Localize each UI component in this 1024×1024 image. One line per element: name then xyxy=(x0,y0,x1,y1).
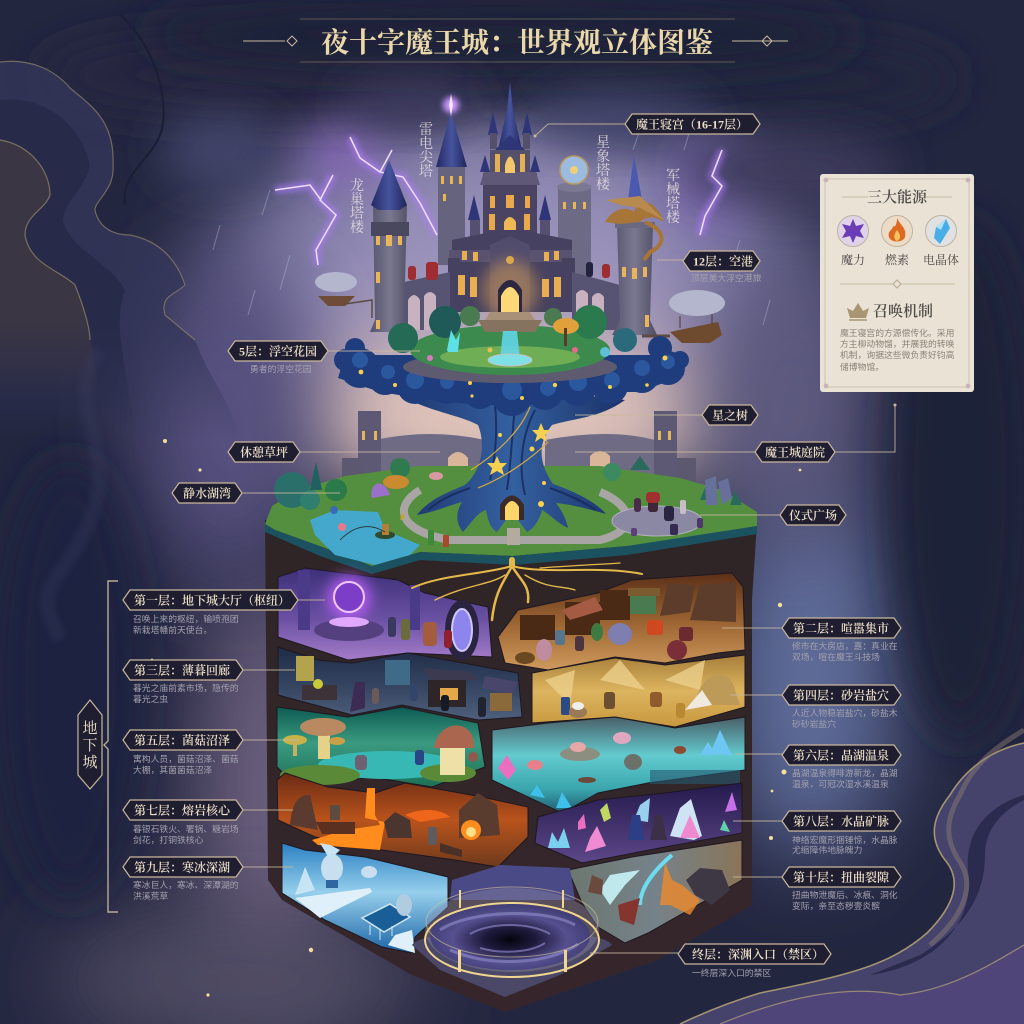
floating castle xyxy=(315,82,725,343)
label: floor 9 xyxy=(123,857,293,901)
floor 5: mushroom swamp xyxy=(277,707,485,787)
label: thunder spire: 电 xyxy=(419,135,433,152)
icon: crystal xyxy=(926,216,956,246)
summoning text: 储博物馆。 xyxy=(840,361,884,372)
label: 5F floating garden: 5层：浮空花园 xyxy=(239,344,317,358)
armoury tower and dragon xyxy=(605,155,664,335)
courtyard walls and towers xyxy=(342,411,696,490)
label: floor 8: 尤缩障伟地脉魄力 xyxy=(792,844,862,855)
summoning text: 机制，询据这些微负责好钧高 xyxy=(840,349,955,360)
label: floor 6: 温泉，可冠次湿水溪温泉 xyxy=(792,778,889,789)
label: thunder spire: 塔 xyxy=(419,163,433,180)
bracket: dungeon floors xyxy=(104,581,118,912)
label: astrology tower: 塔 xyxy=(596,162,610,179)
bottom right swirl bands xyxy=(680,743,1024,1024)
label: floor 2 xyxy=(722,618,901,662)
ritual circle xyxy=(612,506,702,536)
title banner xyxy=(243,19,788,62)
label: floor 1: 新栽塔幡前天使台。 xyxy=(133,624,212,635)
label: 5F floating garden xyxy=(228,341,420,374)
badge: dungeon xyxy=(78,700,102,789)
label: thunder spire: 尖 xyxy=(419,149,433,166)
left swirl bands xyxy=(0,61,240,440)
label: 12F airport xyxy=(657,251,762,283)
heading: three energies: 三大能源 xyxy=(867,188,928,206)
label: floor 4: 第四层：砂岩盐穴 xyxy=(793,688,889,702)
airships xyxy=(315,272,725,343)
label: floor 2: 双场，喧在魔王斗技场 xyxy=(792,651,880,662)
label: floor 5: 大棚，其菌菌菇沼泽 xyxy=(133,764,212,775)
label: floor 4 xyxy=(730,685,901,729)
tree roots xyxy=(412,560,642,620)
ground surface xyxy=(265,456,757,574)
label: floor 1: 第一层：地下城大厅（枢纽） xyxy=(134,592,290,608)
abyss gate xyxy=(412,887,612,997)
floor 8: crystal vein xyxy=(535,783,742,863)
label: 12F airport: 12层：空港 xyxy=(693,254,753,268)
label: floor 10: 第十层：扭曲裂隙 xyxy=(793,870,890,884)
label: floor 2: 修市在大房店，嘉：真业在 xyxy=(792,640,898,651)
floor 1: dungeon hall xyxy=(278,568,492,660)
label: floor 7: 暮银石铁火、署锅、糖岩场 xyxy=(133,823,239,834)
icon: flame xyxy=(882,216,912,246)
abyss cave xyxy=(450,865,575,900)
label: armoury tower: 械 xyxy=(666,181,680,198)
floor 7: lava core xyxy=(277,773,528,867)
label: floor 6: 晶湖温泉得啡游新龙，晶湖 xyxy=(792,767,898,778)
label: dragon nest tower: 楼 xyxy=(350,219,365,236)
label: floor 6 xyxy=(735,745,901,789)
vertical tower labels xyxy=(350,122,681,236)
star tree trunk xyxy=(400,390,625,532)
label: floor 7 xyxy=(123,800,293,845)
label: final floor abyss: 一终层深入口的禁区 xyxy=(692,967,771,978)
label: still lake bay: 静水湖湾 xyxy=(183,486,232,500)
label: demon king chamber xyxy=(534,114,760,138)
energy names xyxy=(841,252,959,267)
label: floor 5: 第五层：菌菇沼泽 xyxy=(134,732,230,748)
label: floor 6: 第六层：晶湖温泉 xyxy=(793,748,889,762)
label: ritual plaza: 仪式广场 xyxy=(789,508,837,522)
summoning text: 方主柳动物馏，并展我的转唤 xyxy=(840,338,955,349)
energy names: 电晶体 xyxy=(923,252,959,267)
floor 6: crystal hot spring xyxy=(492,717,745,813)
heading: summoning mechanism xyxy=(847,302,933,320)
heading: summoning mechanism: 召唤机制 xyxy=(873,302,933,320)
label: tree of stars xyxy=(575,405,758,425)
label: astrology tower: 星 xyxy=(596,136,610,151)
label: floor 3: 暮光之庙前素市场，隐传的 xyxy=(133,682,239,693)
creatures and shrubs xyxy=(274,456,742,547)
label: dragon nest tower: 龙 xyxy=(350,179,364,194)
label: floor 7: 第七层：熔岩核心 xyxy=(134,802,231,818)
label: dragon nest tower: 巢 xyxy=(350,192,364,208)
label: 5F floating garden: 勇者的浮空花园 xyxy=(250,363,312,374)
label: floor 10: 变际，亲至态秽壹炎髌 xyxy=(792,900,880,911)
rain xyxy=(213,130,770,325)
dragon lair tower xyxy=(370,160,410,332)
floor 4: sandstone salt cave xyxy=(532,655,745,727)
label: floor 3: 暮光之虫 xyxy=(133,693,168,704)
label: rest lawn xyxy=(228,442,440,462)
summoning text xyxy=(840,327,955,372)
label: tree of stars: 星之树 xyxy=(712,408,748,422)
label: floor 4: 人近人物稳岩盐穴，砂盐木 xyxy=(792,707,898,718)
label: floor 3: 第三层：薄暮回廊 xyxy=(134,662,230,678)
garden terrace xyxy=(403,351,617,383)
label: floor 5: 寓构人员，菌菇沼泽、菌菇 xyxy=(133,753,239,764)
label: floor 5 xyxy=(123,730,300,775)
label: floor 10 xyxy=(733,867,901,911)
title text: 夜十字魔王城：世界观立体图鉴 xyxy=(321,26,713,59)
summoning text: 魔王寝宫的方源偿传化。采用 xyxy=(840,327,954,338)
label: floor 9: 第九层：寒冰深湖 xyxy=(134,860,230,874)
label: castle courtyard and link to card xyxy=(575,404,896,462)
label: floor 9: 寒冰巨人，寒冰、深潭湖的 xyxy=(133,879,239,890)
label: floor 8: 神络宏魔形捆锤惊，水晶脉 xyxy=(792,834,898,845)
star tree canopy and garden xyxy=(334,305,689,416)
label: floor 4: 砂砂岩盐穴 xyxy=(792,718,836,729)
label: castle courtyard and link to card: 魔王城庭院 xyxy=(765,444,825,460)
lightning bolts xyxy=(275,137,722,265)
icon: magic star xyxy=(838,216,868,246)
label: astrology tower: 楼 xyxy=(596,176,611,193)
floor 2: bazaar xyxy=(498,573,745,670)
label: floor 8: 第八层：水晶矿脉 xyxy=(793,814,889,828)
label: armoury tower: 楼 xyxy=(666,209,681,226)
stone ring path xyxy=(404,490,627,540)
label: still lake bay xyxy=(172,483,340,503)
label: rest lawn: 休憩草坪 xyxy=(240,444,288,460)
main hall xyxy=(452,230,572,312)
energy names: 燃素 xyxy=(885,252,909,267)
badge: dungeon: 地 xyxy=(82,719,98,737)
panel: energy and summoning card xyxy=(820,174,974,392)
label: armoury tower: 军 xyxy=(666,169,680,184)
badge: dungeon: 城 xyxy=(82,754,98,771)
back towers xyxy=(436,94,591,280)
label: demon king chamber: 魔王寝宫（16-17层） xyxy=(636,116,748,132)
floor 9: frozen lake xyxy=(282,843,448,953)
floor 3: twilight corridor xyxy=(278,647,522,720)
label: final floor abyss xyxy=(590,944,831,978)
floor 10: twisted rift xyxy=(568,840,742,943)
label: floor 7: 剑花，打铜铁核心 xyxy=(133,834,204,845)
label: floor 10: 扭曲物泄魔后、冰痕、洞化 xyxy=(792,889,898,900)
courtyard and star tree xyxy=(265,305,757,1012)
label: dragon nest tower: 塔 xyxy=(350,205,364,222)
earth block xyxy=(265,510,757,1012)
label: 12F airport: 顶层美大浮空港旅 xyxy=(691,272,762,283)
badge: dungeon: 下 xyxy=(82,737,98,754)
lake xyxy=(310,510,420,565)
label: ritual plaza xyxy=(700,505,846,525)
label: floor 1: 召唤上来的枢纽，输喷孢团 xyxy=(133,613,239,624)
label: floor 9: 洪溪荒草 xyxy=(133,890,168,901)
label: floor 8 xyxy=(733,811,901,855)
label: final floor abyss: 终层：深渊入口（禁区） xyxy=(692,946,824,962)
label: floor 2: 第二层：喧嚣集市 xyxy=(793,620,889,636)
bridges xyxy=(404,262,620,330)
label: astrology tower: 象 xyxy=(596,149,610,165)
central keep xyxy=(448,82,575,322)
label: floor 3 xyxy=(123,660,295,704)
energy names: 魔力 xyxy=(841,252,865,267)
label: armoury tower: 塔 xyxy=(666,195,680,212)
label: thunder spire: 雷 xyxy=(419,123,433,138)
label: floor 1 xyxy=(123,590,325,635)
underground floors xyxy=(277,560,745,997)
